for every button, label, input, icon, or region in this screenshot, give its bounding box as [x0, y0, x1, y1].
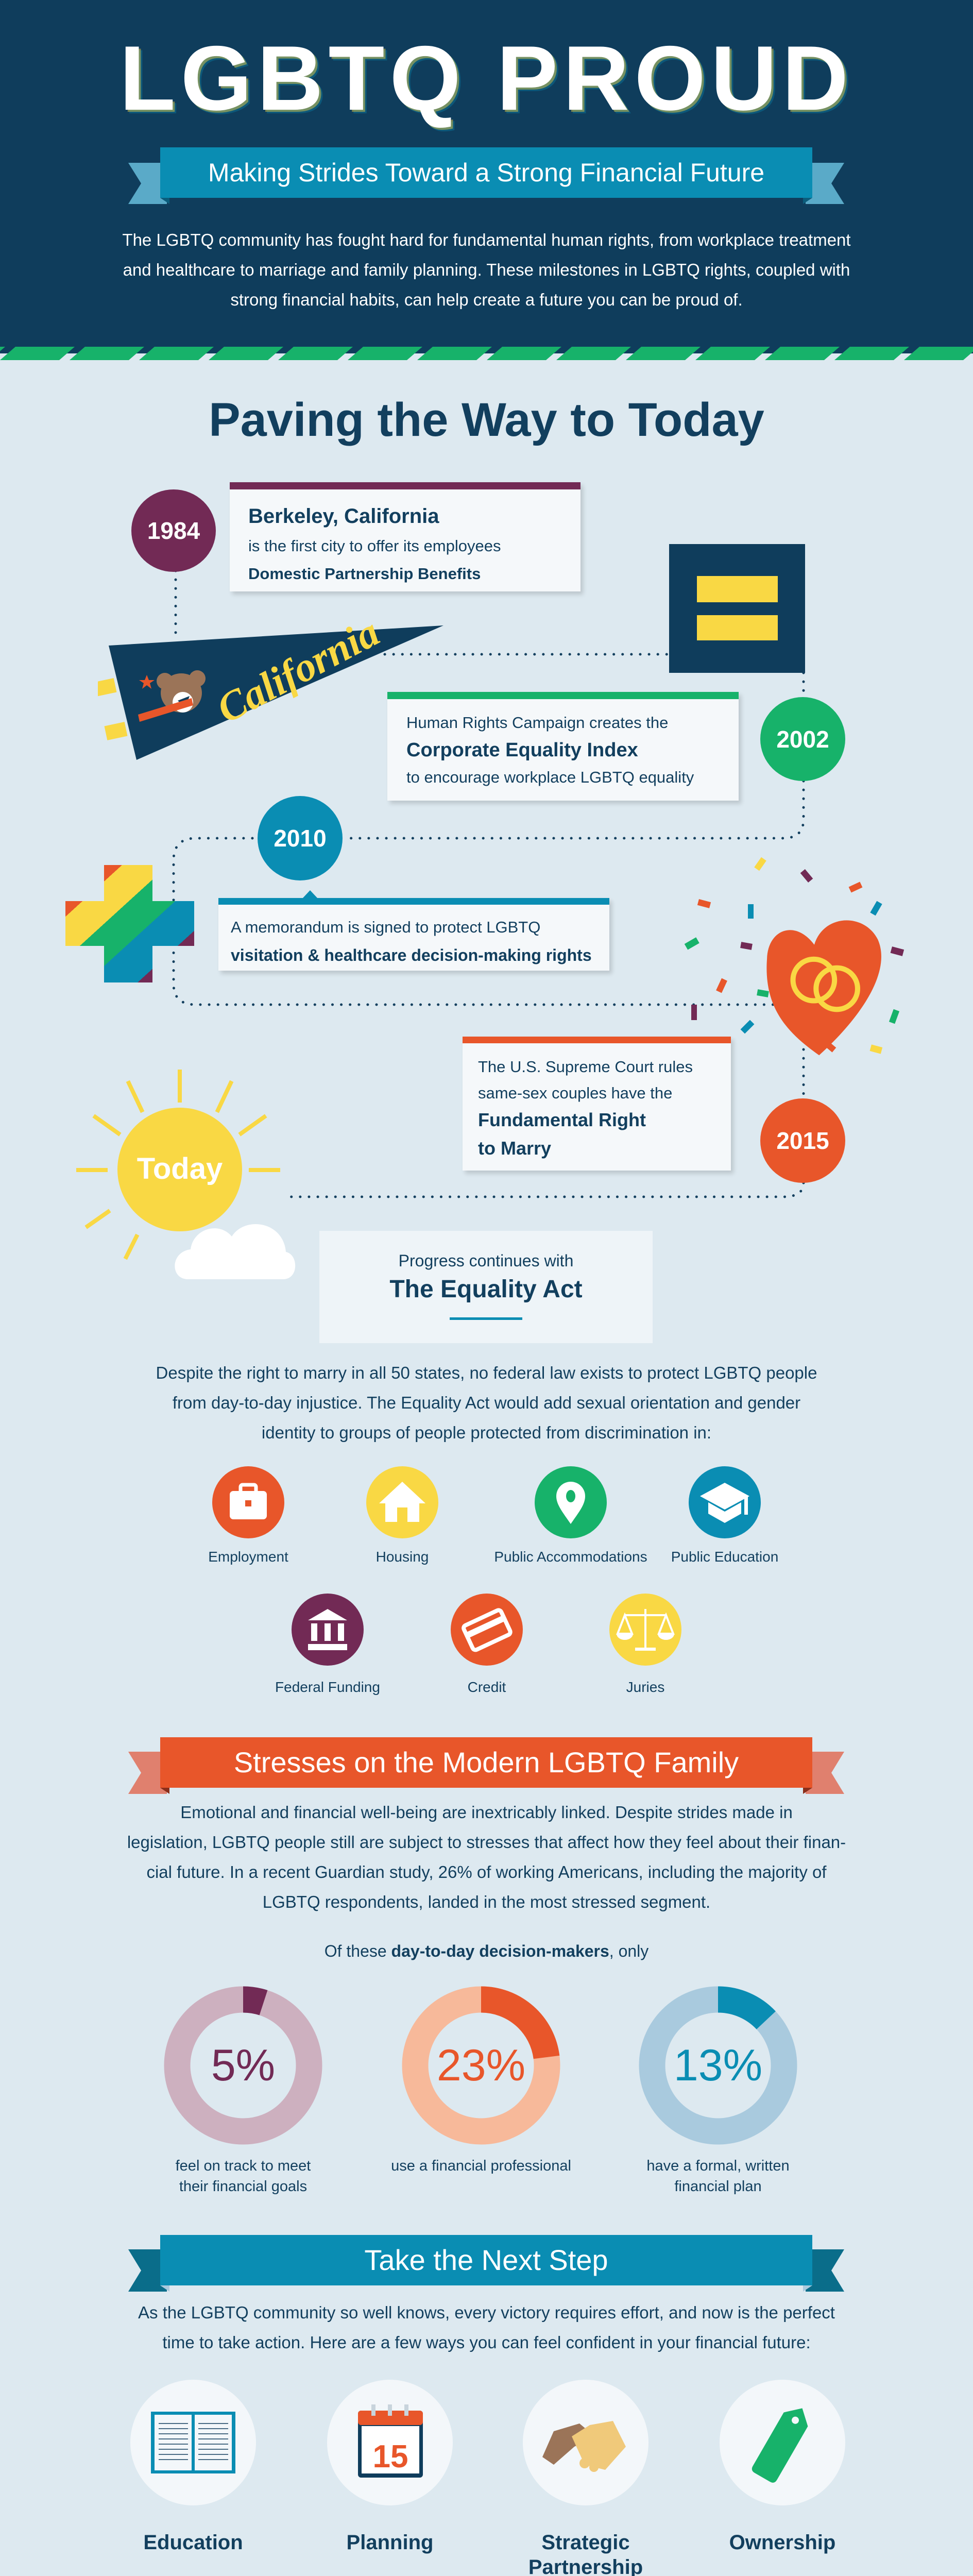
text: Of these day-to-day decision-makers: Of these day-to-day decision-makers, only — [325, 1942, 648, 1960]
icon: Employment: Employment — [208, 1549, 288, 1565]
text: Equality Act paragraph: Despite the right to marry in all 50 states, no federal law exists to protect LGBTQ people — [156, 1363, 817, 1382]
icon: Public Education: Public Education — [671, 1549, 778, 1565]
box: Fundamental Right to Marry: The U.S. Supreme Court rules — [478, 1058, 693, 1076]
icon: Public Education — [671, 1466, 778, 1565]
title: LGBTQ PROUD — [120, 27, 853, 129]
icon: HRC equality logo — [669, 544, 805, 673]
ribbon: subtitle: Making Strides Toward a Strong Financial Future — [208, 158, 764, 187]
icon: Public Accommodations: Public Accommodations — [494, 1549, 647, 1565]
chart: donut 23%: use a financial professional — [391, 2158, 571, 2174]
milestone 2002 — [387, 692, 845, 805]
panel: The Equality Act: Progress continues with — [399, 1251, 573, 1270]
intro paragraph: strong financial habits, can help create a future you can be proud of. — [230, 290, 743, 309]
icon: Credit: Credit — [468, 1679, 506, 1695]
chart: donut 5% — [164, 1987, 322, 2195]
step: Strategic Partnership — [523, 2380, 648, 2576]
text: Equality Act paragraph — [156, 1363, 817, 1442]
text: stresses paragraph: Emotional and financial well-being are inextricably linked. Despite strides made in — [180, 1803, 793, 1822]
icon: handshake — [523, 2380, 648, 2505]
box: Corporate Equality Index — [387, 692, 739, 801]
box: Berkeley: is the first city to offer its employees — [248, 537, 501, 555]
step: Ownership — [720, 2380, 845, 2554]
box: Fundamental Right to Marry: to Marry — [478, 1138, 551, 1159]
text: next step paragraph: As the LGBTQ community so well knows, every victory requires effort, and now is the perfect — [138, 2303, 835, 2322]
step: Planning: Planning — [347, 2531, 433, 2554]
intro paragraph: and healthcare to marriage and family planning. These milestones in LGBTQ rights, coupled with — [123, 260, 850, 279]
box: Fundamental Right to Marry — [463, 1037, 731, 1171]
text: next step paragraph: time to take action. Here are a few ways you can feel confident in your financial future: — [162, 2333, 811, 2352]
ribbon: Take the Next Step — [128, 2235, 844, 2292]
milestone 2015 — [463, 1037, 845, 1183]
intro paragraph: The LGBTQ community has fought hard for fundamental human rights, from workplace treatment — [122, 230, 851, 249]
icon: Federal Funding — [275, 1594, 380, 1695]
text: Equality Act paragraph: from day-to-day injustice. The Equality Act would add sexual orientation and gender — [173, 1393, 800, 1412]
heading: Paving the Way to Today: Paving the Way to Today — [209, 394, 764, 446]
chart: donut 5%: 5% — [211, 2041, 275, 2090]
step: Strategic Partnership: Strategic — [541, 2531, 630, 2554]
step: Ownership: Ownership — [729, 2531, 835, 2554]
header background — [0, 0, 973, 353]
box: Fundamental Right to Marry: Fundamental Right — [478, 1109, 646, 1130]
box: Fundamental Right to Marry: same-sex couples have the — [478, 1084, 672, 1102]
milestone 1984 — [131, 482, 585, 596]
circle: 2010: 2010 — [274, 825, 327, 852]
icon: Housing: Housing — [376, 1549, 429, 1565]
circle: 2002: 2002 — [776, 725, 829, 752]
icon: calendar — [327, 2380, 453, 2505]
circle: 2015 — [760, 1098, 845, 1183]
icon: calendar: 15 — [373, 2439, 408, 2475]
timeline dotted path — [172, 572, 805, 1198]
icon: heart with rings and confetti — [684, 857, 904, 1055]
ribbon: Take the Next Step: Take the Next Step — [364, 2244, 608, 2276]
circle: 1984 — [131, 489, 216, 572]
chart: donut 13%: 13% — [674, 2041, 762, 2090]
step: Education: Education — [143, 2531, 243, 2554]
panel: The Equality Act: The Equality Act — [389, 1276, 583, 1303]
box: 2010 memorandum — [218, 898, 609, 971]
text: stresses paragraph — [127, 1803, 846, 1911]
chart: donut 23% — [391, 1987, 571, 2174]
chart: donut 5%: feel on track to meet — [176, 2158, 311, 2174]
icon: Employment — [208, 1466, 288, 1565]
chart: donut 13%: have a formal, written — [646, 2158, 790, 2174]
text: stresses paragraph: legislation, LGBTQ people still are subject to stresses that affect how they feel about their finan- — [127, 1833, 846, 1852]
text: stresses paragraph: LGBTQ respondents, landed in the most stressed segment. — [263, 1892, 710, 1911]
box: Corporate Equality Index: to encourage workplace LGBTQ equality — [406, 768, 694, 786]
circle: 2010 — [258, 796, 343, 880]
box: Berkeley — [230, 482, 581, 591]
box: 2010 memorandum: visitation & healthcare decision-making rights — [231, 946, 592, 964]
icon: Juries — [609, 1594, 681, 1695]
step: Planning — [327, 2380, 453, 2554]
circle: 1984: 1984 — [147, 517, 200, 544]
ribbon: Stresses on the Modern LGBTQ Family — [128, 1737, 844, 1794]
icon: Juries: Juries — [626, 1679, 664, 1695]
icon: Housing — [366, 1466, 438, 1565]
panel: The Equality Act — [319, 1231, 653, 1343]
ribbon: subtitle — [128, 147, 844, 204]
box: Corporate Equality Index: Corporate Equality Index — [406, 739, 638, 761]
chart: donut 23%: 23% — [437, 2041, 525, 2090]
icon: California pennant — [98, 621, 443, 760]
icon: sun Today with cloud — [76, 1070, 296, 1279]
intro paragraph — [122, 230, 851, 309]
icon: Federal Funding: Federal Funding — [275, 1679, 380, 1695]
icon: book — [130, 2380, 256, 2505]
text: stresses paragraph: cial future. In a recent Guardian study, 26% of working Americans, including the majority of — [146, 1862, 827, 1882]
icon: rainbow cross — [65, 865, 194, 982]
box: 2010 memorandum: A memorandum is signed to protect LGBTQ — [231, 918, 540, 936]
chart: donut 13%: financial plan — [674, 2178, 762, 2195]
step: Education — [130, 2380, 256, 2554]
box: Corporate Equality Index: Human Rights Campaign creates the — [406, 714, 668, 732]
circle: 2002 — [760, 697, 845, 781]
box: Berkeley: Berkeley, California — [248, 505, 439, 528]
ribbon: Stresses on the Modern LGBTQ Family: Stresses on the Modern LGBTQ Family — [234, 1746, 739, 1778]
icon: tag — [720, 2380, 845, 2505]
icon: sun Today with cloud: Today — [137, 1152, 223, 1185]
icon: Credit — [451, 1594, 523, 1695]
text: Equality Act paragraph: identity to groups of people protected from discrimination in: — [262, 1423, 711, 1442]
box: Berkeley: Domestic Partnership Benefits — [248, 565, 481, 583]
circle: 2015: 2015 — [776, 1127, 829, 1154]
chart: donut 5%: their financial goals — [179, 2178, 307, 2195]
chart: donut 13% — [639, 1987, 797, 2195]
icon: Public Accommodations — [494, 1466, 647, 1565]
text: next step paragraph — [138, 2303, 835, 2352]
